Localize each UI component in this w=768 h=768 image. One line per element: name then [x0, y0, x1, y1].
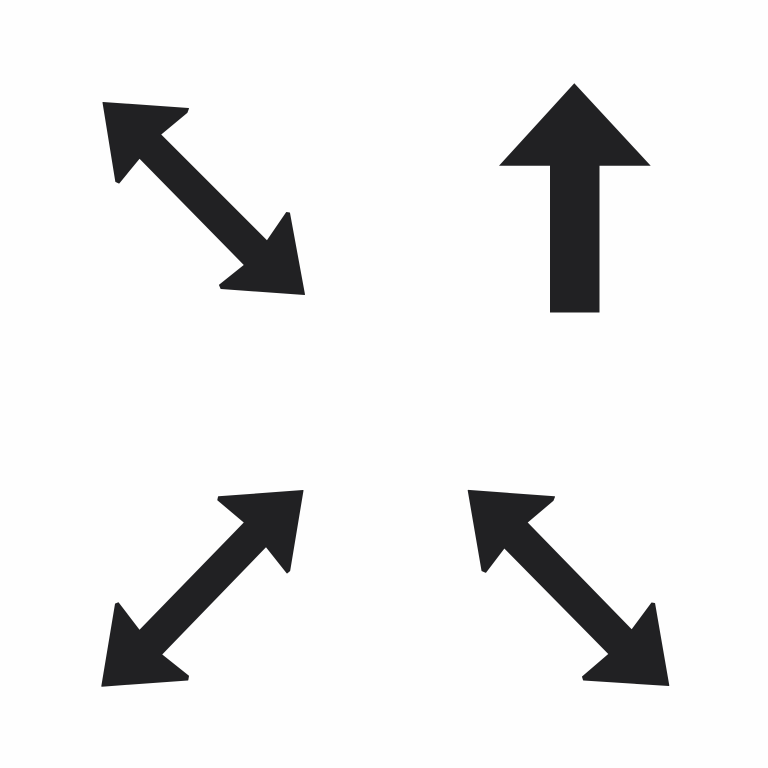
- arrow: single-headed up top-right: [499, 83, 651, 312]
- arrow: double-headed diagonal top-left: [103, 102, 304, 294]
- arrow: double-headed diagonal bottom-right: [468, 490, 669, 686]
- arrow: double-headed diagonal bottom-left: [102, 490, 303, 686]
